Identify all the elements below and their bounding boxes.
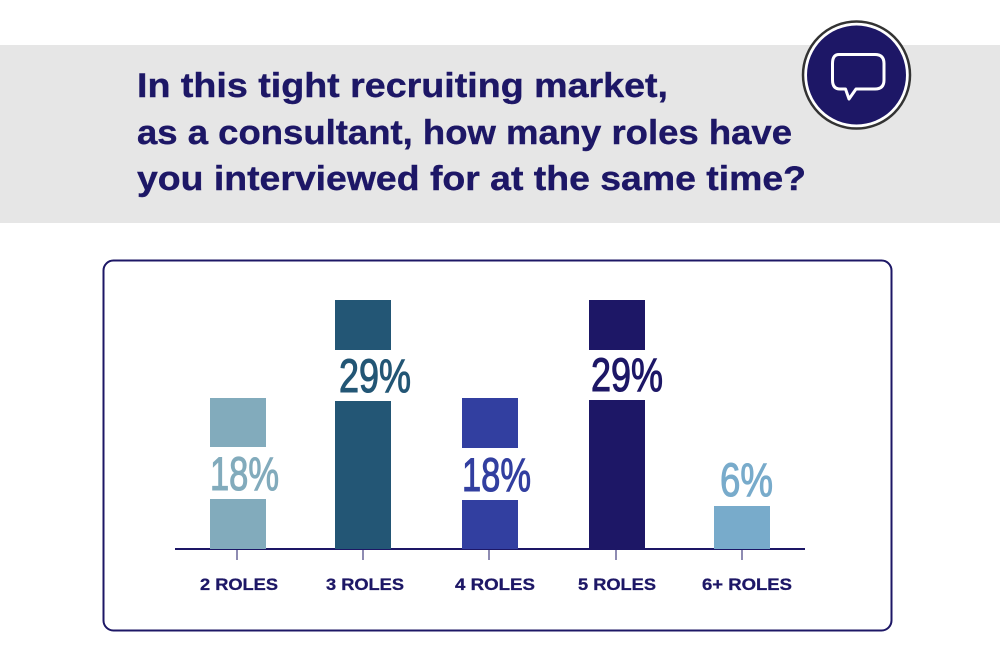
title: you interviewed for at the same time? [137,160,806,198]
bar: 5 roles 29%: 29% [591,348,663,401]
axis labels [200,575,792,594]
axis labels: 2 ROLES [200,575,278,594]
axis labels: 5 ROLES [578,575,656,594]
bar: 4 roles 18%: 18% [462,448,531,501]
header band [0,45,1000,223]
chart panel [104,260,892,630]
bar: 3 roles 29%: 29% [339,349,411,402]
bar: 3 roles 29% [335,300,411,549]
title: In this tight recruiting market, [137,67,668,105]
bar: 5 roles 29% [589,300,663,549]
axis labels: 3 ROLES [326,575,404,594]
bar: 6+ roles 6%: 6% [720,453,773,506]
bar: 6+ roles 6% [714,453,773,549]
bar: 4 roles 18% [462,398,531,549]
icon: speech bubble badge [803,22,910,128]
bar: 2 roles 18%: 18% [210,447,279,500]
axis labels: 6+ ROLES [702,575,792,594]
axis labels: 4 ROLES [455,575,535,594]
axis [175,549,805,560]
title: as a consultant, how many roles have [137,114,792,152]
bar: 2 roles 18% [210,398,279,549]
title [137,67,806,198]
